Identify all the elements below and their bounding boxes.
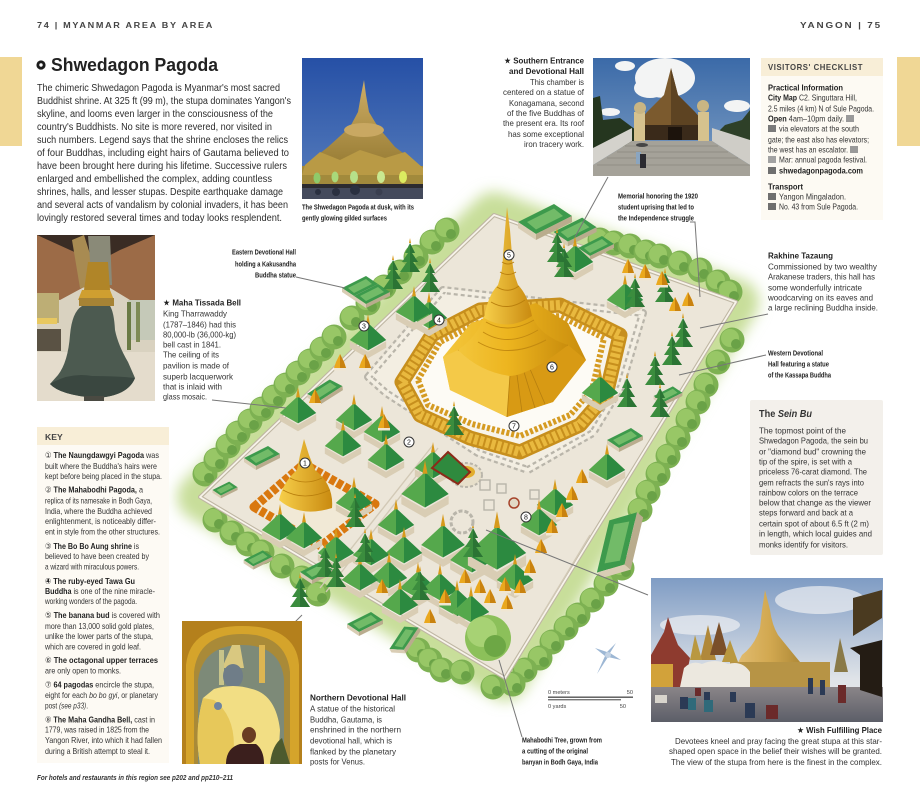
panel: key: post (see p33). [45,700,88,710]
mahabodhi tree [465,615,511,661]
annotation: maha tissada bell: that is inlaid with [163,382,222,392]
icon: compass [595,643,621,674]
panel: key: kept before being placed in the stupa. [45,471,162,481]
panel: visitors' checklist: shwedagonpagoda.com [779,166,863,176]
foliage glow around the complex [200,215,736,678]
panel: visitors' checklist: via elevators at the south [779,124,859,134]
main stupa octagon [443,303,586,417]
intro text block: skyline, and looms even larger in the consciousness of the [37,109,273,120]
label: memorial: the Independence struggle [618,214,694,222]
stupa bell and spire [458,316,568,376]
panel: key: ② The Mahabodhi Pagoda, a [45,484,143,494]
panel: the sein bu: certain spot of about 6.5 ft (2 m) [759,519,869,529]
panel: key: enlightenment, is noticeably differ- [45,516,156,526]
intro text block: country's Buddhists. No site is more revered, nor visited in [37,122,272,133]
label: mahabodhi tree: banyan in Bodh Gaya, India [522,758,599,766]
numbered markers: 2 [407,440,411,446]
label: memorial: Memorial honoring the 1920 [618,192,698,200]
label: eastern devotional hall: Buddha statue [255,270,296,280]
panel: the sein bu: monks identify for visitors. [759,540,848,550]
annotation: southern entrance: iron tracery work. [524,139,584,149]
panel: key: a wizard with miraculous powers. [45,562,139,572]
leader lines [212,177,768,737]
photo caption: dusk: gently glowing gilded surfaces [302,214,387,222]
label: eastern devotional hall: Eastern Devotional Hall [232,248,296,256]
annotation: southern entrance: Konagamana, second [509,98,584,108]
numbered markers: 6 [550,364,554,372]
panel: the sein bu: Shwedagon Pagoda, the sein bu [759,436,868,446]
intro text block: The chimeric Shwedagon Pagoda is Myanmar's most sacred [37,83,280,94]
panel: visitors' checklist: VISITORS' CHECKLIST [768,62,863,72]
panel: key: ① The Naungdawgyi Pagoda was [45,450,159,460]
page header: left: 74 | MYANMAR AREA BY AREA [37,21,214,30]
photo caption: dusk [302,202,414,222]
label: western devotional hall [768,348,832,380]
ground and walls [200,215,736,678]
scale bar: 50 [620,704,626,710]
panel: the sein bu: The topmost point of the [759,426,846,436]
panel: key: Buddha is one of the nine miracle- [45,586,155,596]
panel: key: believed to have been created by [45,551,150,561]
panel: key: ⑤ The banana bud is covered with [45,610,160,620]
label: western devotional hall: Hall featuring a statue [768,360,829,368]
annotation: maha tissada bell: glass mosaic. [163,392,207,402]
intro text block: and several acts of vandalism by colonial invaders, it has been [37,200,288,211]
annotation: rakhine tazaung: some wonderfully intricate [768,283,862,293]
label: mahabodhi tree: a cutting of the original [522,746,588,756]
annotation: rakhine tazaung: woodcarving on its eaves and [767,293,873,303]
annotation: southern entrance: This chamber is [530,77,584,87]
caption: wish fulfilling place: Devotees kneel and pray facing the great stupa at this star- [675,736,882,746]
panel: visitors' checklist: gate; the east also has elevators; [768,134,869,144]
footer note: For hotels and restaurants in this region see p202 and pp210–211 [37,775,233,782]
panel: visitors' checklist: Practical Information [768,82,843,92]
numbered markers: 7 [512,424,516,430]
panel: key: ⑧ The Maha Gandha Bell, cast in [45,714,155,724]
photo: southern entrance [593,58,750,176]
right chapter tab [897,57,920,146]
annotation: southern entrance: ★ Southern Entrance [504,56,584,66]
annotation: maha tissada bell: superb lacquerwork [163,372,234,382]
panel: the sein bu [750,400,883,555]
panel: the sein bu: priceless 76-carat diamond. The [759,467,867,477]
panel: visitors' checklist: 2.5 miles (4 km) N of Sule Pagoda. [768,104,874,114]
photo: pagoda at dusk [302,58,423,199]
annotation: southern entrance: and Devotional Hall [509,66,584,76]
annotation: maha tissada bell: 80,000-lb (36,000-kg) [163,330,236,340]
label: eastern devotional hall: holding a Kakusandha [235,260,297,268]
border bushes [192,218,744,700]
numbered markers: 8 [524,514,528,522]
annotation: southern entrance [503,56,585,149]
panel: key: ent in style from the other structures. [45,526,160,536]
panel: the sein bu: rainbow colors on the terrace [759,488,858,498]
annotation: rakhine tazaung [767,251,878,313]
numbered markers: 3 [362,324,366,330]
panel: visitors' checklist: Yangon Mingaladon. [779,192,846,202]
second stupa and enclosure [254,464,375,546]
walkways [320,445,590,618]
annotation: northern devotional hall: enshrined in the northern [310,725,401,735]
label: mahabodhi tree: Mahabodhi Tree, grown from [522,736,602,744]
numbered markers [300,250,557,522]
label: memorial: student uprising that led to [618,202,694,212]
annotation: northern devotional hall: Buddha, Gautama, is [310,715,382,725]
annotation: maha tissada bell: King Tharrawaddy [163,309,228,319]
label: western devotional hall: Western Devotional [768,348,823,358]
panel: key: ③ The Bo Bo Aung shrine is [45,541,139,551]
photo: buddha statue [182,621,302,764]
intro text block: Buddhist shrine. At 325 ft (99 m), the stupa dominates Yangon's [37,96,291,107]
panel: visitors' checklist: No. 43 from Sule Pagoda. [779,202,858,212]
title: Shwedagon Pagoda [51,54,219,75]
annotation: northern devotional hall: posts for Venus. [310,757,365,767]
panel: the sein bu: The Sein Bu [759,408,813,420]
panel: key: ⑥ The octagonal upper terraces [45,655,158,665]
scale bar [548,690,633,710]
panel: visitors' checklist [761,58,883,220]
temple ring [402,305,620,452]
annotation: northern devotional hall: devotional hall, which is [310,736,392,746]
intro text block: have been brought here during his lifetime. Successive rulers [37,161,287,172]
scale bar: 0 yards [548,704,567,710]
panel: key: Yangon River, into which it had fallen [45,735,162,745]
annotation: maha tissada bell: (1787–1846) had this [163,320,236,330]
panel: the sein bu: gem refracts the sun's rays into [759,478,864,488]
photo: wish fulfilling place [651,578,883,722]
illustration: pagoda complex [192,204,744,700]
panel: key: which are covered in gold leaf. [44,642,141,652]
stone pattern ring [368,290,643,470]
caption: wish fulfilling place: ★ Wish Fulfilling Place [797,725,882,735]
panel: key: India, where the Buddha achieved [45,506,152,516]
intro text block [37,83,291,224]
panel: visitors' checklist: the west has an escalator. [768,144,848,154]
annotation: northern devotional hall: flanked by the planetary [310,747,397,757]
scale bar: 0 meters [548,690,570,696]
annotation: maha tissada bell: bell cast in 1841. [163,340,221,350]
annotation: southern entrance: the present era. Its roof [503,118,585,128]
panel: visitors' checklist: Transport [768,182,803,192]
panel: key: KEY [45,432,63,442]
label: western devotional hall: of the Kassapa Buddha [768,370,832,380]
annotation: maha tissada bell: pavilion is made of [163,361,230,371]
caption: wish fulfilling place: The view of the stupa from here is the finest in the complex. [671,757,882,767]
label: eastern devotional hall [232,248,297,280]
panel: key: more than 13,000 solid gold plates, [45,621,154,631]
halls and pavilions [212,204,694,659]
annotation: maha tissada bell [163,298,241,402]
plinth details [432,452,539,533]
page header: right: YANGON | 75 [800,21,882,30]
panel: the sein bu: steps forward and back at a [759,508,853,518]
panel: visitors' checklist: Open 4am–10pm daily. [768,114,844,124]
label: memorial [618,192,698,222]
annotation: rakhine tazaung: Commissioned by two wealthy [768,262,878,272]
panel: visitors' checklist: Mar: annual pagoda festival. [779,154,867,164]
photo: maha tissada bell [37,235,155,401]
panel: key: working wonders of the pagoda. [44,596,137,606]
scale bar: 50 [627,690,633,696]
panel: the sein bu: or "diamond bud" crowning the [759,447,866,457]
annotation: rakhine tazaung: Rakhine Tazaung [768,251,833,261]
annotation: southern entrance: of the five Buddhas of [507,108,585,118]
panel: the sein bu: below that change as the viewer [759,498,871,508]
panel: key [37,427,169,763]
intro text block: lovingly restored several times and today looks resplendent. [37,213,282,224]
numbered markers: 4 [437,318,441,324]
annotation: rakhine tazaung: Arakanese traders, this hall has [768,272,875,282]
panel: visitors' checklist: City Map C2. Singuttara Hill, [768,92,857,102]
intro text block: such numbers. Legend says that the shrine encloses the relics [37,135,288,146]
annotation: southern entrance: has some exceptional [508,129,584,139]
panel: the sein bu: in length, which local guides and [759,529,872,539]
panel: key: ⑦ 64 pagodas encircle the stupa, [45,680,154,690]
intro text block: of four Buddhas, including eight hairs of Gautama believed to [37,148,289,159]
intro text block: shrines, halls, and lesser stupas. Despite earthquake damage [37,187,283,198]
panel: key: 1779, was raised in 1825 from the [45,724,149,734]
photo caption: dusk: The Shwedagon Pagoda at dusk, with its [302,202,414,212]
panel: key: during a British attempt to steal it. [45,746,150,756]
panel: key: eight for each bo bo gyi, or planetary [45,690,159,700]
panel: key: are only open to monks. [45,666,121,676]
left chapter tab [0,57,22,146]
annotation: rakhine tazaung: a large reclining Buddha inside. [768,303,878,313]
panel: the sein bu: tip of the spire, is set with a [759,457,852,467]
caption: wish fulfilling place [669,725,882,767]
annotation: northern devotional hall [310,693,406,767]
panel: key: replica of its namesake in Bodh Gaya, [45,496,152,506]
annotation: southern entrance: centered on a statue of [503,87,585,97]
panel: key: unlike the lower parts of the stupa, [45,631,153,641]
panel: key: ④ The ruby-eyed Tawa Gu [45,576,135,586]
annotation: maha tissada bell: The ceiling of its [163,350,219,360]
label: mahabodhi tree [522,736,602,766]
intro text block: enlarged and embellished the complex, adding countless [37,174,272,185]
annotation: northern devotional hall: Northern Devotional Hall [310,693,406,703]
caption: wish fulfilling place: shaped open space in the belief their wishes will be granted. [669,746,882,756]
numbered markers: 1 [303,460,307,468]
numbered markers: 5 [507,252,511,260]
panel: key: built where the Buddha's hairs were [45,461,157,471]
annotation: maha tissada bell: ★ Maha Tissada Bell [163,298,241,308]
annotation: northern devotional hall: A statue of the historical [310,704,395,714]
